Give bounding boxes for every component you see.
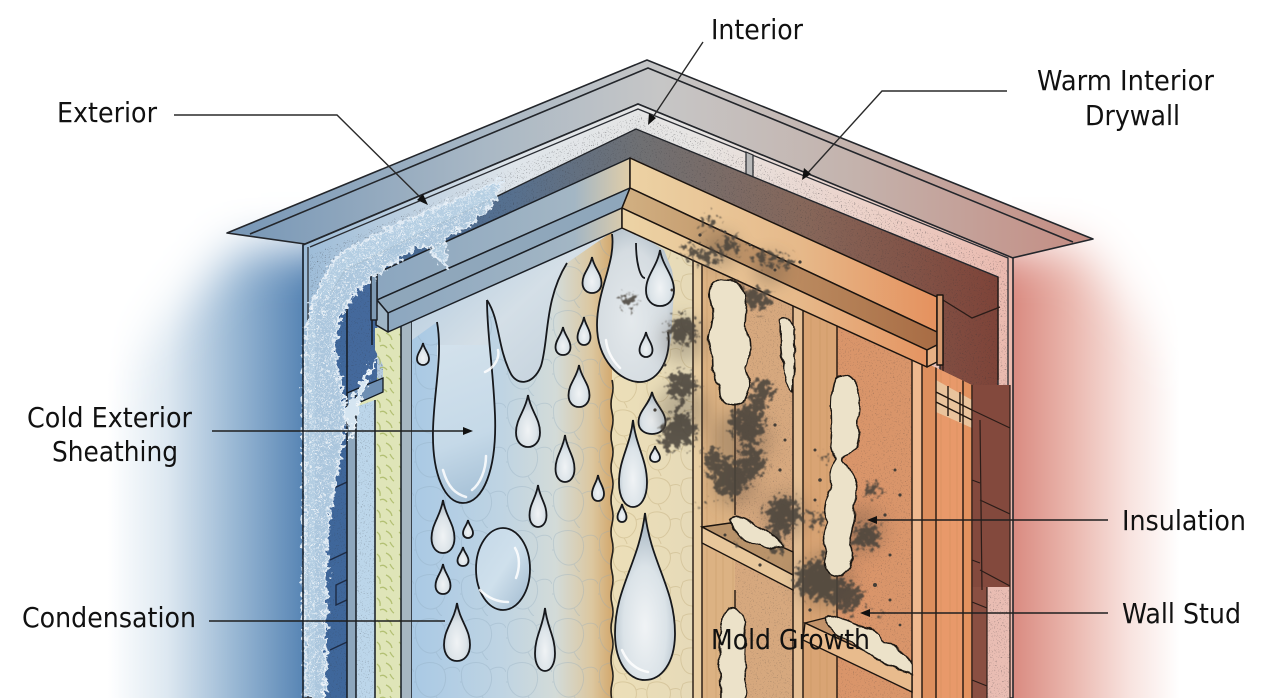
label: Interior: Interior xyxy=(711,14,804,46)
tan insulation panel xyxy=(611,220,693,698)
studs and cavity wood xyxy=(693,220,972,698)
fire block shelf lower xyxy=(803,618,912,692)
droplet highlights xyxy=(443,340,648,672)
label: Cold Exterior Sheathing: Cold Exterior xyxy=(27,402,193,434)
label: Exterior xyxy=(57,97,428,205)
leader arrow: Insulation xyxy=(867,516,1108,524)
roof cap flashing xyxy=(227,60,1093,258)
outline of large drop xyxy=(433,300,495,503)
label: Exterior: Exterior xyxy=(57,97,158,129)
label: Cold Exterior Sheathing xyxy=(27,402,473,468)
label: Warm Interior Drywall: Warm Interior xyxy=(1037,65,1215,97)
background: warm interior gradient xyxy=(1014,218,1168,698)
wall outer edge xyxy=(302,245,304,698)
leader arrow: Wall Stud xyxy=(860,609,1108,617)
wall cavity layers xyxy=(412,220,972,698)
large drop body shading xyxy=(433,345,495,503)
right sheet xyxy=(597,228,674,382)
exterior stucco layer xyxy=(303,104,1013,698)
leader arrow: Cold Exterior Sheathing xyxy=(212,427,473,435)
label: Interior xyxy=(648,14,804,125)
foam insulation clumps xyxy=(709,278,912,698)
leader arrow: Warm Interior Drywall xyxy=(802,91,1007,180)
left-hand rafter boards xyxy=(371,158,630,332)
middle hanging drip xyxy=(487,263,567,382)
condensation water sheets xyxy=(412,225,674,503)
mold patches xyxy=(618,211,889,626)
mold spores xyxy=(653,230,902,626)
label: Wall Stud xyxy=(860,598,1241,630)
right-hand rafter boards xyxy=(622,158,943,367)
mold discoloration halo xyxy=(656,232,884,608)
water droplets xyxy=(417,250,675,680)
dark sheathing layer xyxy=(315,129,1000,698)
fire block shelf upper xyxy=(702,523,793,590)
background: cold exterior gradient xyxy=(122,216,302,698)
label: Warm Interior Drywall: Drywall xyxy=(1085,100,1180,132)
cold sheathing panel xyxy=(412,220,612,698)
label: Mold Growth: Mold Growth xyxy=(711,624,870,656)
label: Wall Stud: Wall Stud xyxy=(1122,598,1241,630)
ice and frost band xyxy=(303,180,503,698)
label: Warm Interior Drywall xyxy=(802,65,1215,180)
leader line: Condensation xyxy=(209,620,445,622)
mold growth xyxy=(618,211,902,626)
drywall joint xyxy=(746,152,753,177)
leader arrow: Exterior xyxy=(174,115,428,205)
wall section diagram xyxy=(227,60,1093,698)
label: Insulation: Insulation xyxy=(1122,505,1246,537)
leader arrow: Interior xyxy=(648,42,703,125)
label: Condensation: Condensation xyxy=(22,602,196,634)
silver sheet behind the drips xyxy=(412,225,622,503)
label: Cold Exterior Sheathing: Sheathing xyxy=(52,436,178,468)
right brown blocks and stucco strip xyxy=(972,385,1010,698)
left wall layers xyxy=(347,275,412,698)
label: Insulation xyxy=(867,505,1246,537)
bracket xyxy=(347,378,383,408)
